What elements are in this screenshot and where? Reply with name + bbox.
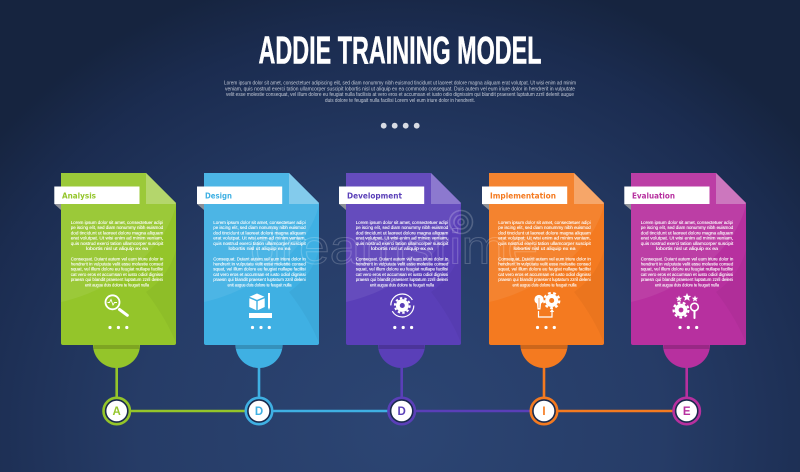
body text: Consequat. Duiant autem vel eum iriure dolor in bbox=[213, 256, 306, 262]
body text: hendrerit in vulputate velit esse molestie consed bbox=[213, 262, 306, 268]
body text: hendrerit in vulputate velit esse molestie consed bbox=[498, 262, 591, 268]
body text: praesn qui blandit praesent luptatum zzril deleni bbox=[641, 277, 733, 283]
body text: squat, vel illum dolore eu feugiat nullape facilisi bbox=[356, 267, 448, 273]
body text bbox=[356, 220, 449, 288]
body text: Consequat. Duiant autem vel eum iriure dolor in bbox=[356, 256, 449, 262]
badge A: A bbox=[113, 406, 121, 418]
dots bbox=[536, 326, 556, 329]
icon: bulb and gear bbox=[534, 293, 559, 317]
body text: Consequat. Duiant autem vel eum iriure dolor in bbox=[71, 256, 164, 262]
body text: hendrerit in vulputate velit esse molestie consed bbox=[356, 262, 449, 268]
body text: quis nostrud exerci tation ullamcorper suscipit bbox=[498, 241, 591, 247]
body text: hendrerit in vulputate velit esse molestie consed bbox=[71, 262, 164, 268]
body text: pe iscing elit, sed diam nonummy nibh euismod bbox=[356, 225, 449, 231]
body text: squat, vel illum dolore eu feugiat nullape facilisi bbox=[498, 267, 591, 273]
badge D bbox=[246, 398, 272, 424]
body text bbox=[71, 220, 164, 288]
page fold bbox=[716, 173, 746, 204]
body text: erat volutpat. Ut wisi enim ad minim veniam, bbox=[641, 236, 733, 242]
subtitle text block: velit esse molestie consequat, vel illum dolore eu feugiat nulla facilisis at vero eros et accumsan et iusto odio dignissim qui blandit praesent luptatum zzril delenit augue bbox=[226, 92, 574, 98]
body text bbox=[641, 220, 734, 288]
body text: dod tincidunt ut laoreet dolore magna aliquam bbox=[356, 230, 448, 236]
body text: lobortis nisl ut aliquip ex ea bbox=[228, 246, 291, 252]
icon: gear with cycle arrows bbox=[391, 294, 414, 317]
badge I: I bbox=[542, 406, 546, 418]
body text: erat volutpat. Ut wisi enim ad minim veniam, bbox=[71, 236, 163, 242]
body text: cat vero eros et accumsan et iusto odiol dignissi bbox=[356, 272, 448, 278]
dots bbox=[108, 326, 128, 329]
icon: cube, pencil and ruler bbox=[249, 293, 272, 318]
body text: lobortis nisl ut aliquip ex ea bbox=[656, 246, 718, 252]
card body bbox=[61, 173, 176, 345]
connector line bbox=[131, 410, 673, 412]
card body bbox=[631, 173, 746, 345]
label bbox=[339, 186, 424, 204]
body text: dod tincidunt ut laoreet dolore magna aliquam bbox=[641, 230, 733, 236]
body text: pe iscing elit, sed diam nonummy nibh euismod bbox=[71, 225, 164, 231]
card body bbox=[204, 173, 319, 345]
body text: squat, vel illum dolore eu feugiat nullape facilisi bbox=[71, 267, 163, 273]
panel: Analysis bbox=[54, 173, 176, 424]
subtitle text block bbox=[224, 80, 576, 104]
page fold bbox=[289, 173, 319, 204]
body text: enit augue duis dolore te feugait nulla bbox=[655, 282, 719, 288]
page fold bbox=[146, 173, 176, 204]
dots bbox=[393, 326, 413, 329]
connector tab bbox=[378, 345, 425, 368]
body text: lobortis nisl ut aliquip ex ea bbox=[371, 246, 433, 252]
body text: praesn qui blandit praesent luptatum zzril deleni bbox=[498, 277, 591, 283]
body text: Lorem ipsum dolor sit amet, consectetuer adipi bbox=[71, 220, 163, 226]
body text: dod tincidunt ut laoreet dolore magna aliquam bbox=[213, 230, 306, 236]
body text: enit augue duis dolore te feugait nulla bbox=[370, 282, 434, 288]
page fold bbox=[574, 173, 604, 204]
body text: cat vero eros et accumsan et iusto odiol dignissi bbox=[213, 272, 306, 278]
icon: stars, gear and magnifier bbox=[674, 293, 698, 318]
subtitle text block: Lorem ipsum dolor sit amet, consectetuer adipiscing elit, sed diam nonummy nibh euismod tincidunt ut laoreet dolore magna aliquam erat volutpat. Ut wisi enim ad minim bbox=[224, 80, 576, 86]
panel: Development bbox=[339, 173, 461, 424]
title: ADDIE TRAINING MODEL bbox=[258, 30, 542, 72]
body text: pe iscing elit, sed diam nonummy nibh euismod bbox=[213, 225, 306, 231]
panel: Design bbox=[197, 173, 319, 424]
body text: cat vero eros et accumsan et iusto odiol dignissi bbox=[498, 272, 591, 278]
pagination dots bbox=[381, 123, 420, 129]
body text: quis nostrud exerci tation ullamcorper suscipit bbox=[641, 241, 734, 247]
card body bbox=[489, 173, 604, 345]
body text: lobortis nisl ut aliquip ex ea bbox=[514, 246, 576, 252]
dots bbox=[678, 326, 698, 329]
label bbox=[54, 186, 139, 204]
body text: enit augue duis dolore te feugait nulla bbox=[228, 282, 292, 288]
body text: squat, vel illum dolore eu feugiat nullape facilisi bbox=[213, 267, 306, 273]
badge E bbox=[674, 398, 700, 424]
body text: enit augue duis dolore te feugait nulla bbox=[85, 282, 149, 288]
connector tab bbox=[236, 345, 282, 368]
body text: enit augue duis dolore te feugait nulla bbox=[512, 282, 577, 288]
body text: quis nostrud exerci tation ullamcorper suscipit bbox=[71, 241, 164, 247]
body text: erat volutpat. Ut wisi enim ad minim veniam, bbox=[498, 236, 591, 242]
badge D: D bbox=[398, 406, 406, 418]
body text: pe iscing elit, sed diam nonummy nibh euismod bbox=[498, 225, 591, 231]
page fold bbox=[431, 173, 461, 204]
body text: lobortis nisl ut aliquip ex ea bbox=[86, 246, 148, 252]
label bbox=[197, 186, 282, 204]
badge D bbox=[388, 398, 415, 424]
body text: Lorem ipsum dolor sit amet, consectetuer adipi bbox=[498, 220, 591, 226]
body text: dod tincidunt ut laoreet dolore magna aliquam bbox=[71, 230, 163, 236]
panel: Analysis: Analysis bbox=[62, 190, 96, 200]
panel: Design: Design bbox=[205, 190, 232, 200]
panel: Implementation bbox=[482, 173, 604, 424]
body text: Lorem ipsum dolor sit amet, consectetuer adipi bbox=[641, 220, 733, 226]
body text: hendrerit in vulputate velit esse molestie consed bbox=[641, 262, 734, 268]
panel: Evaluation bbox=[624, 173, 746, 424]
body text: erat volutpat. Ut wisi enim ad minim veniam, bbox=[356, 236, 448, 242]
body text bbox=[213, 220, 306, 288]
connector tab bbox=[663, 345, 710, 368]
body text: praesn qui blandit praesent luptatum zzril deleni bbox=[356, 277, 448, 283]
body text: Lorem ipsum dolor sit amet, consectetuer adipi bbox=[213, 220, 306, 226]
badge E: E bbox=[683, 406, 691, 418]
badge I bbox=[531, 398, 557, 424]
subtitle text block: duis dolore te feugait nulla facilisi Lorem vel eum iriure dolor in hendrerit. bbox=[325, 98, 475, 104]
watermark: dreamstime bbox=[250, 222, 538, 274]
connector tab bbox=[93, 345, 140, 368]
subtitle text block: veniam, quis nostrud exerci tation ullamcorper suscipit lobortis nisl ut aliquip ex ea commodo consequat. Duis autem vel eum iriure dolor in hendrerit in vulputate bbox=[225, 86, 575, 92]
body text: dod tincidunt ut laoreet dolore magna aliquam bbox=[498, 230, 591, 236]
body text: praesn qui blandit praesent luptatum zzril deleni bbox=[213, 277, 306, 283]
body text bbox=[498, 220, 591, 288]
connector tab bbox=[520, 345, 568, 368]
icon: magnifier with pulse bbox=[106, 295, 127, 315]
label bbox=[482, 186, 567, 204]
body text: squat, vel illum dolore eu feugiat nullape facilisi bbox=[641, 267, 733, 273]
body text: pe iscing elit, sed diam nonummy nibh euismod bbox=[641, 225, 734, 231]
body text: quis nostrud exerci tation ullamcorper suscipit bbox=[213, 241, 306, 247]
body text: Lorem ipsum dolor sit amet, consectetuer adipi bbox=[356, 220, 448, 226]
body text: Consequat. Duiant autem vel eum iriure dolor in bbox=[498, 256, 591, 262]
body text: praesn qui blandit praesent luptatum zzril deleni bbox=[71, 277, 163, 283]
dots bbox=[251, 326, 271, 329]
body text: erat volutpat. Ut wisi enim ad minim veniam, bbox=[213, 236, 306, 242]
label bbox=[624, 186, 710, 204]
body text: quis nostrud exerci tation ullamcorper suscipit bbox=[356, 241, 449, 247]
panel: Development: Development bbox=[347, 190, 402, 200]
body text: Consequat. Duiant autem vel eum iriure dolor in bbox=[641, 256, 734, 262]
card body bbox=[346, 173, 461, 345]
badge A bbox=[104, 398, 130, 424]
panel: Evaluation: Evaluation bbox=[632, 190, 675, 200]
panel: Implementation: Implementation bbox=[490, 190, 556, 200]
body text: cat vero eros et accumsan et iusto odiol dignissi bbox=[71, 272, 163, 278]
body text: cat vero eros et accumsan et iusto odiol dignissi bbox=[641, 272, 733, 278]
badge D: D bbox=[255, 406, 263, 418]
